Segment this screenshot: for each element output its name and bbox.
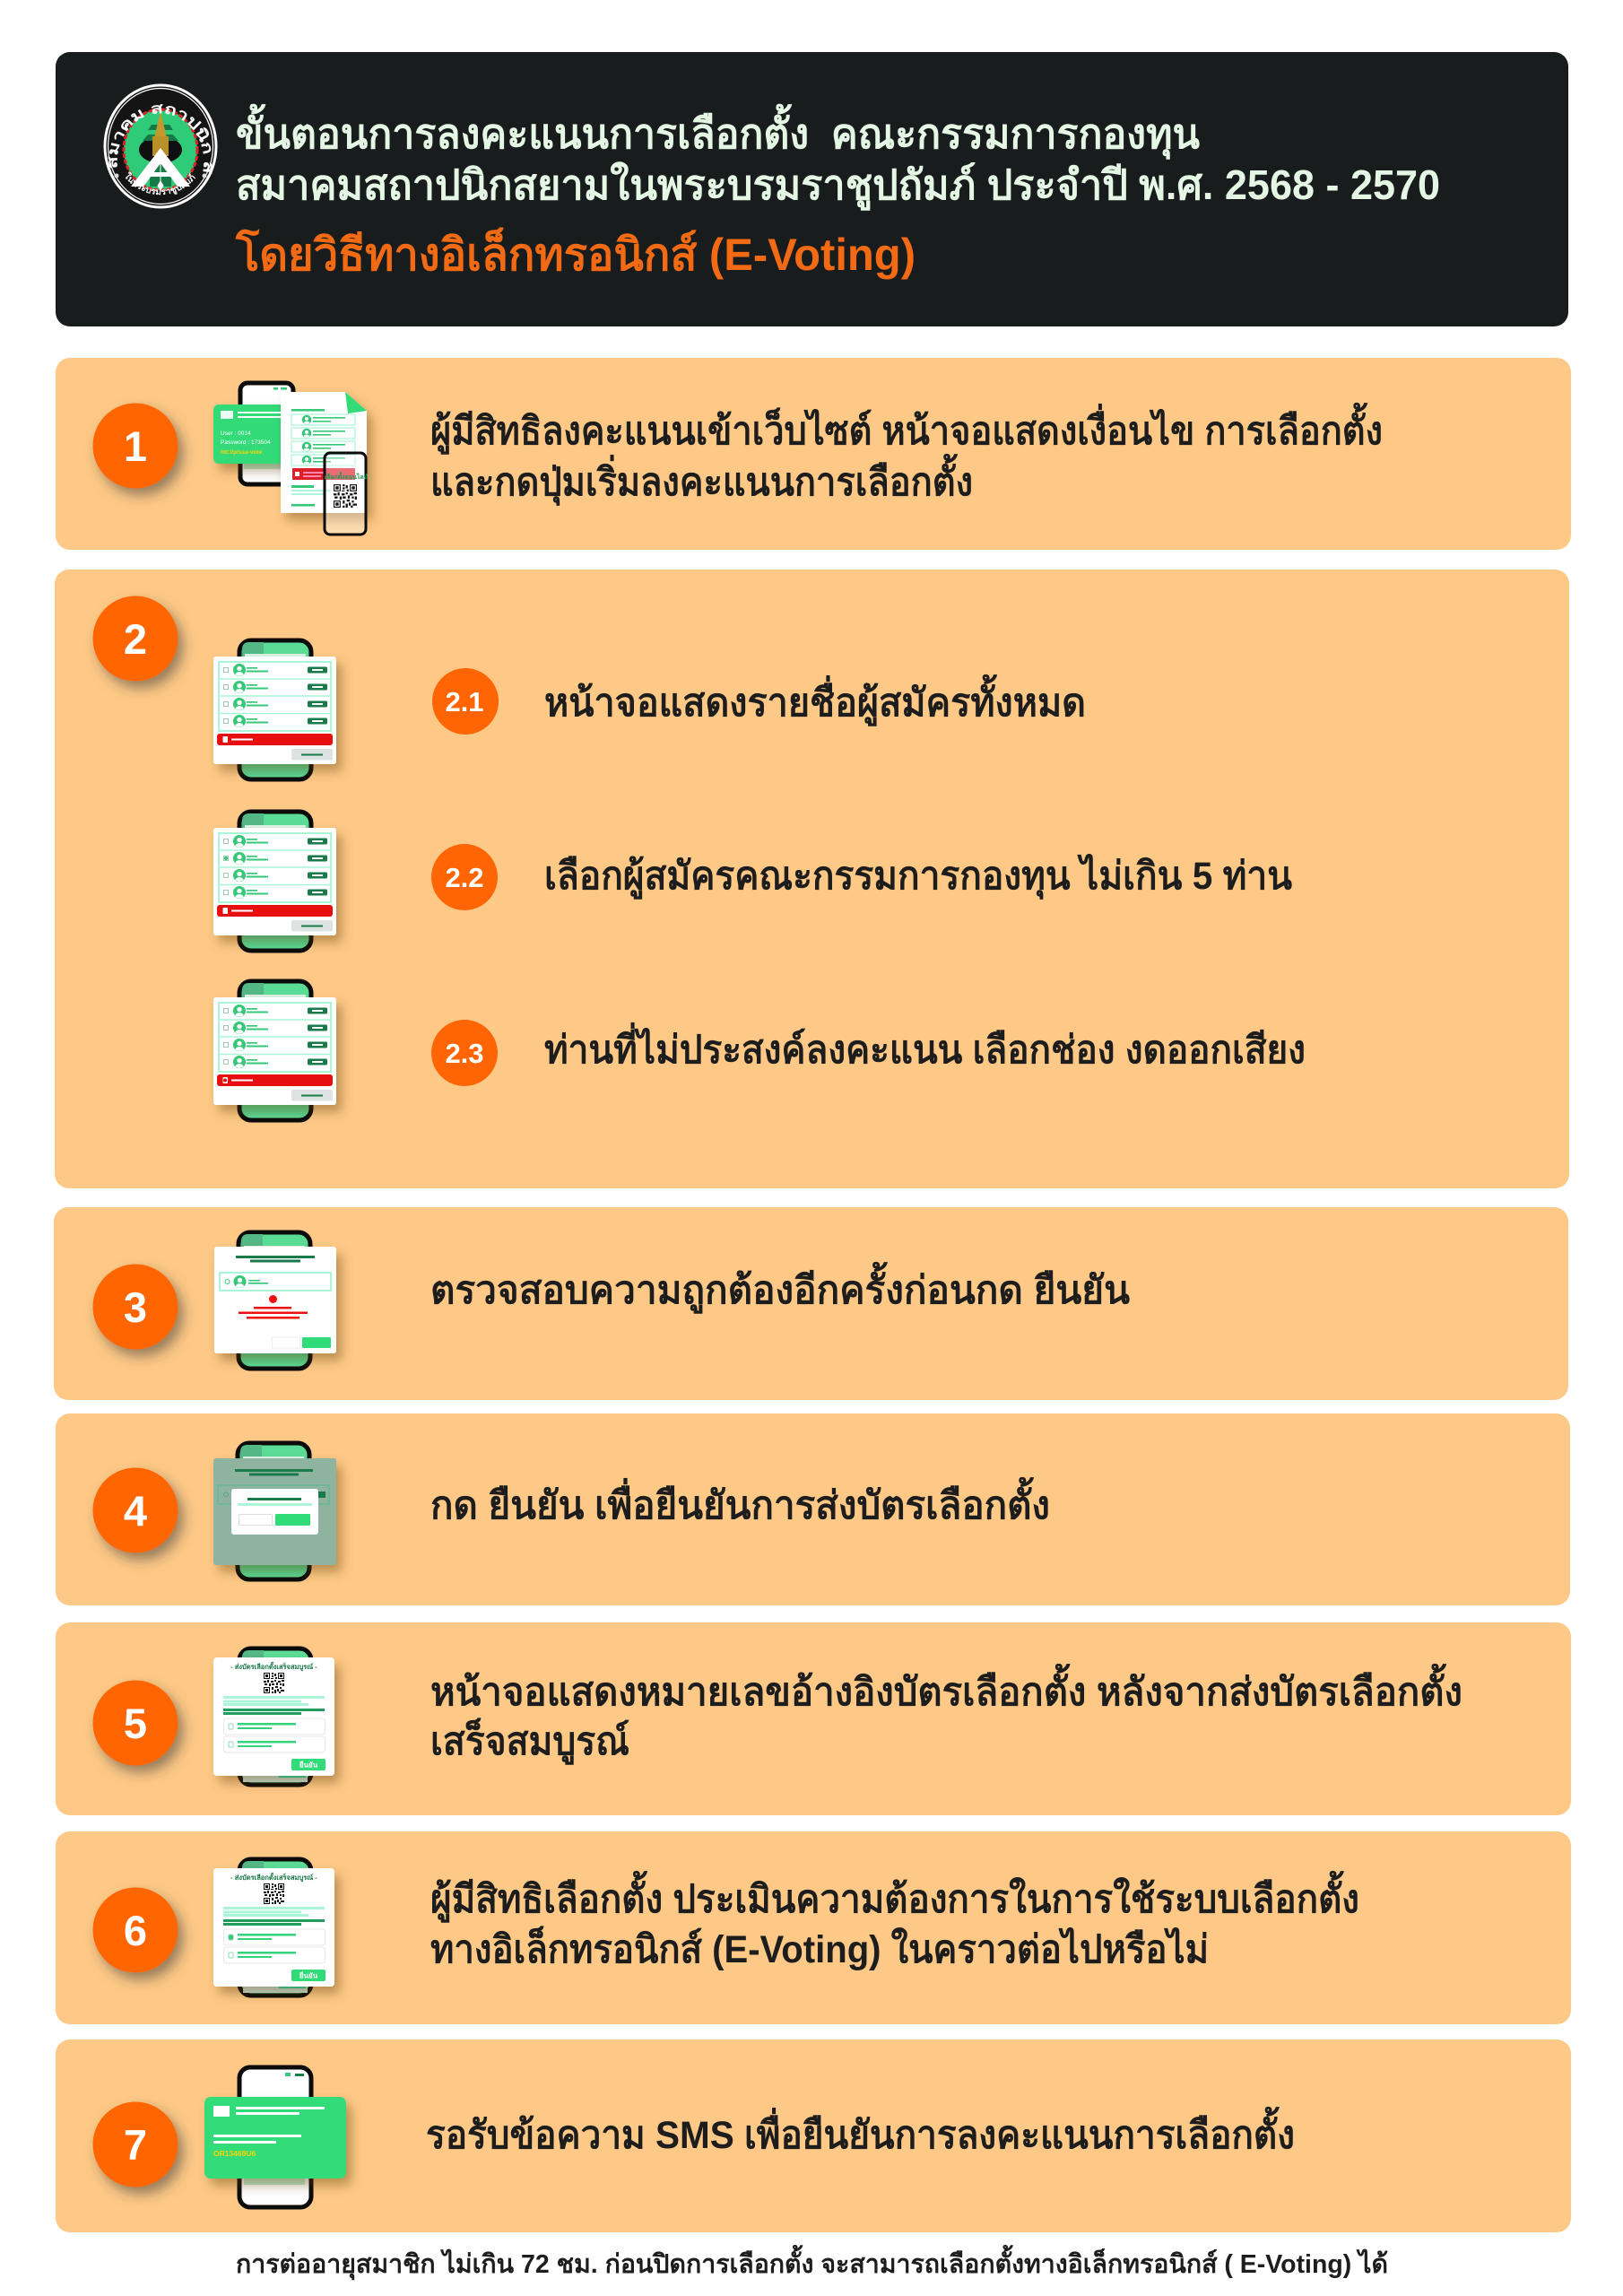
icon: phone, login card and document: User : 0014 (221, 430, 251, 437)
icon: association logo (104, 84, 217, 208)
icon: phone, login card and document: htt://p/ssa-vote (221, 449, 263, 456)
icon: confirm dialog screen (213, 1443, 336, 1579)
number badge 7 (93, 2102, 178, 2187)
step 5 text (430, 1663, 1462, 1765)
icon: candidate list screen 2.3 (213, 981, 336, 1120)
step 6 text: ผู้มีสิทธิเลือกตั้ง ประเมินความต้องการในการใช้ระบบเลือกตั้ง (430, 1870, 1359, 1923)
step 1 text: และกดปุ่มเริ่มลงคะแนนการเลือกตั้ง (430, 453, 973, 507)
step 5 text: หน้าจอแสดงหมายเลขอ้างอิงบัตรเลือกตั้ง หลังจากส่งบัตรเลือกตั้ง (430, 1663, 1462, 1714)
step 1 text: ผู้มีสิทธิลงคะแนนเข้าเว็บไซต์ หน้าจอแสดงเงื่อนไข การเลือกตั้ง (430, 402, 1383, 455)
icon: SMS card on phone: OR13469U6 (213, 2149, 256, 2158)
step 7 text: รอรับข้อความ SMS เพื่อยืนยันการลงคะแนนการเลือกตั้ง (426, 2106, 1295, 2157)
number badge 1 (93, 404, 178, 488)
number badge 5 (93, 1681, 178, 1765)
panel: step 1 (56, 358, 1571, 550)
panel: step 2 (55, 570, 1569, 1188)
panel: step 3 (54, 1207, 1568, 1400)
icon: candidate list screen 2.1 (213, 640, 336, 779)
step 6 text (430, 1870, 1359, 1971)
icon: confirmation screen (214, 1232, 336, 1369)
heading line 3: โดยวิธีทางอิเล็กทรอนิกส์ (E-Voting) (235, 227, 916, 280)
badge 2.3: 2.3 (445, 1038, 484, 1069)
icon: association logo: ในพระบรมราชูปถัมภ์ (126, 172, 195, 196)
step 6 text: ทางอิเล็กทรอนิกส์ (E-Voting) ในคราวต่อไปหรือไม่ (430, 1926, 1209, 1971)
heading line 2: สมาคมสถาปนิกสยามในพระบรมราชูปถัมภ์ ประจำปี พ.ศ. 2568 - 2570 (236, 161, 1440, 211)
number badge 5: 5 (124, 1700, 147, 1747)
step 2.1 text: หน้าจอแสดงรายชื่อผู้สมัครทั้งหมด (544, 674, 1086, 726)
number badge 2: 2 (124, 615, 147, 663)
number badge 6 (93, 1887, 178, 1973)
panel: step 4 (56, 1413, 1570, 1605)
icon: SMS card on phone (204, 2067, 346, 2207)
panel: step 5 (56, 1622, 1571, 1815)
number badge 2 (93, 596, 178, 682)
number badge 7: 7 (124, 2121, 147, 2169)
number badge 3 (93, 1265, 178, 1349)
number badge 4 (93, 1467, 178, 1553)
icon: phone, login card and document: Password : 173504 (221, 439, 271, 446)
icon: ballot reference screen (213, 1648, 334, 1785)
icon: phone, login card and document (213, 383, 369, 535)
step 2.3 text: ท่านที่ไม่ประสงค์ลงคะแนน เลือกช่อง งดออกเสียง (544, 1022, 1306, 1072)
number badge 6: 6 (124, 1907, 147, 1954)
panel: step 7 (56, 2039, 1571, 2232)
step 4 text: กด ยืนยัน เพื่อยืนยันการส่งบัตรเลือกตั้ง (430, 1476, 1050, 1527)
heading line 1: ขั้นตอนการลงคะแนนการเลือกตั้ง คณะกรรมการกองทุน (236, 103, 1201, 160)
step 3 text: ตรวจสอบความถูกต้องอีกครั้งก่อนกด ยืนยัน (430, 1261, 1131, 1314)
step 1 text (430, 402, 1383, 507)
header panel (56, 52, 1568, 326)
step 2.2 text: เลือกผู้สมัครคณะกรรมการกองทุน ไม่เกิน 5 ท่าน (544, 853, 1293, 900)
icon: phone, login card and document: เลือกตั้งออนไลน์ (325, 471, 369, 481)
badge 2.1: 2.1 (445, 686, 484, 718)
icon: evaluation screen (213, 1859, 334, 1996)
badge 2.2 (431, 844, 498, 910)
panel: step 6 (56, 1831, 1571, 2024)
badge 2.1 (432, 668, 499, 735)
number badge 1: 1 (124, 422, 147, 470)
badge 2.2: 2.2 (445, 862, 484, 893)
footer note: การต่ออายุสมาชิก ไม่เกิน 72 ชม. ก่อนปิดการเลือกตั้ง จะสามารถเลือกตั้งทางอิเล็กทรอนิกส์ ( E-Voting) ได้ (236, 2244, 1388, 2280)
step 5 text: เสร็จสมบูรณ์ (430, 1718, 629, 1765)
icon: candidate list screen 2.2 (213, 812, 336, 951)
badge 2.3 (431, 1020, 498, 1086)
number badge 3: 3 (124, 1283, 147, 1331)
number badge 4: 4 (124, 1487, 147, 1535)
